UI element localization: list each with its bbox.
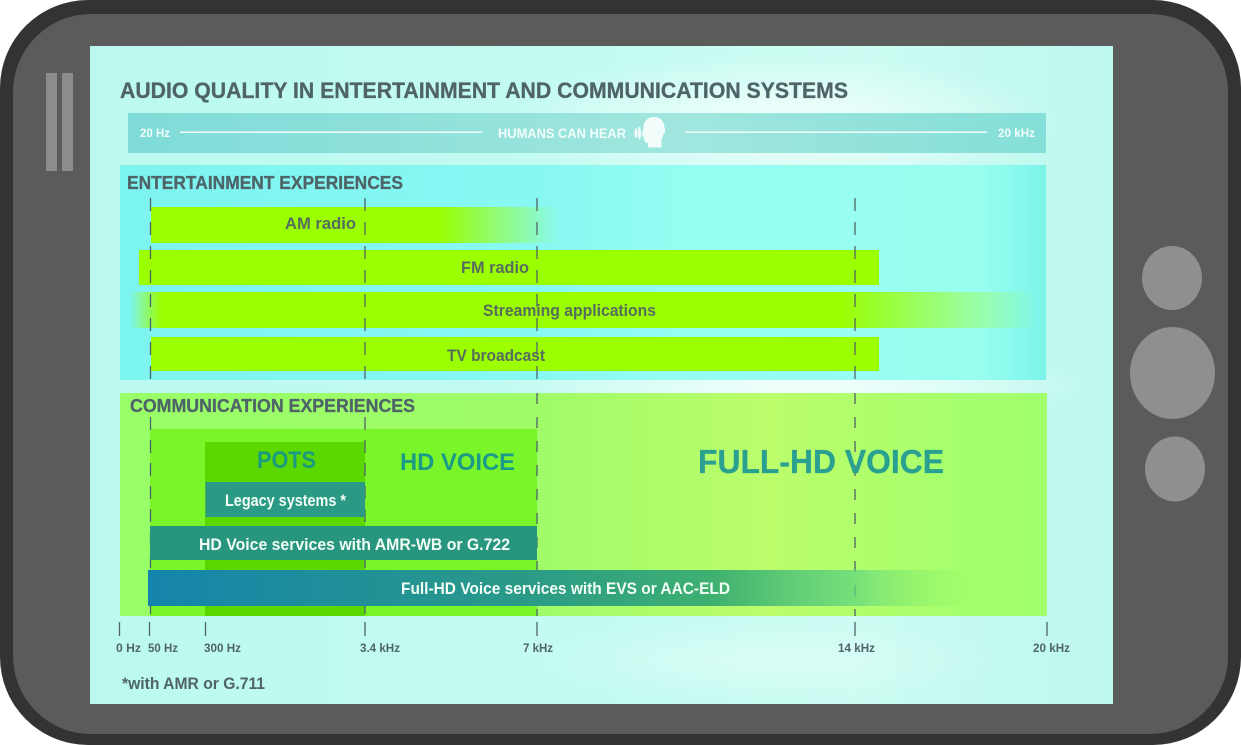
bar: AM radio (151, 207, 560, 243)
heading: entertainment: ENTERTAINMENT EXPERIENCES (127, 173, 403, 193)
footnote: *with AMR or G.711 (122, 674, 265, 693)
label: HD VOICE: HD VOICE (400, 449, 515, 476)
hearing range bar: HUMANS CAN HEAR (498, 125, 626, 141)
bar: streaming applications (130, 292, 1038, 328)
bar: legacy systems (206, 482, 365, 517)
icon: human head hearing (634, 117, 665, 148)
frequency axis: 14 kHz (838, 641, 875, 655)
frequency axis: 3.4 kHz (360, 641, 400, 655)
label: streaming applications: Streaming applications (483, 301, 656, 320)
screen background (90, 46, 1113, 704)
heading: communication: COMMUNICATION EXPERIENCES (130, 396, 415, 416)
label: AM radio: AM radio (285, 214, 356, 233)
frequency axis: 300 Hz (204, 641, 241, 655)
bar: HD voice services: HD Voice services with AMR-WB or G.722 (199, 535, 510, 554)
icon: phone side buttons (1130, 246, 1215, 502)
label: FULL-HD VOICE: FULL-HD VOICE (698, 443, 944, 480)
hearing range bar (128, 113, 1046, 153)
title: AUDIO QUALITY IN ENTERTAINMENT AND COMMUNICATION SYSTEMS (120, 78, 848, 103)
bar: legacy systems: Legacy systems * (225, 491, 346, 510)
frequency axis: 50 Hz (148, 641, 178, 655)
frequency axis: 0 Hz (116, 641, 141, 655)
panel: communication experiences (120, 393, 1047, 616)
bar: HD voice services (150, 526, 537, 560)
panel: entertainment experiences (120, 165, 1046, 380)
bar: full-HD voice services (148, 570, 980, 606)
frequency axis: 20 kHz (1033, 641, 1070, 655)
band: POTS range (205, 442, 365, 616)
communication frequency guide lines (150, 393, 855, 616)
icon: speaker grille bars (46, 73, 73, 171)
frequency axis (116, 622, 1070, 655)
label: TV broadcast: TV broadcast (447, 346, 545, 365)
hearing range bar: 20 kHz (998, 128, 1035, 140)
bar: FM radio (139, 250, 879, 285)
bar: full-HD voice services: Full-HD Voice services with EVS or AAC-ELD (401, 579, 730, 598)
label: POTS: POTS (257, 447, 316, 474)
band: HD voice range (150, 429, 537, 616)
frequency axis: 7 kHz (523, 641, 553, 655)
entertainment frequency guide lines (150, 198, 855, 380)
label: FM radio: FM radio (461, 258, 529, 277)
bar: TV broadcast (151, 337, 879, 371)
hearing range bar: 20 Hz (140, 128, 170, 140)
